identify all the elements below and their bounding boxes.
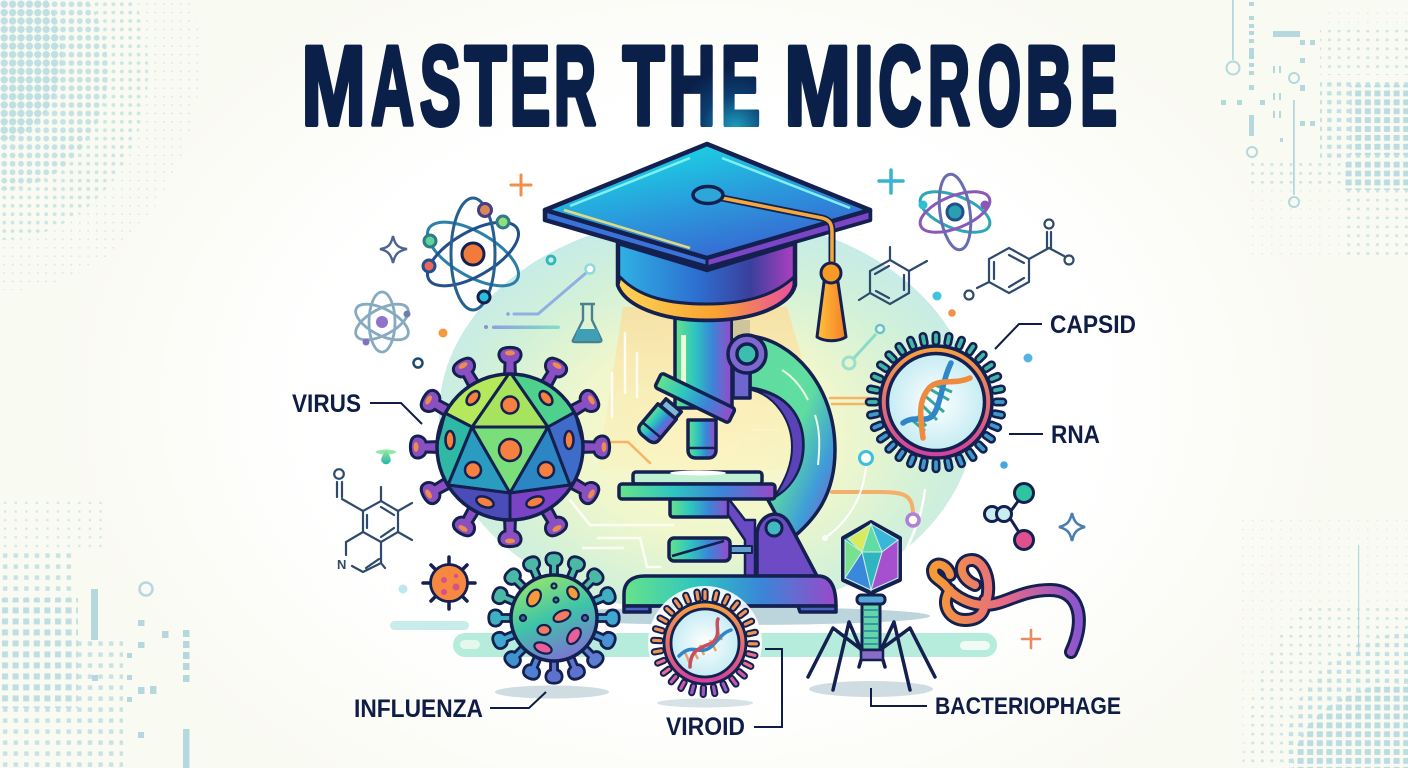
microscope arm xyxy=(750,336,835,540)
title: C xyxy=(878,24,922,148)
right objective lens xyxy=(688,420,716,458)
icon: blue plus xyxy=(879,170,903,193)
gradient circuit line xyxy=(484,325,560,329)
icon: nitrogen molecule xyxy=(334,469,412,572)
circuit traces behind microscope xyxy=(570,333,950,570)
title: O xyxy=(978,24,1021,148)
icon: benzene ring xyxy=(859,247,927,304)
label: influenza xyxy=(354,692,546,723)
tube bracket xyxy=(733,360,750,398)
viroid DNA rungs xyxy=(684,632,722,664)
icon: bacteriophage xyxy=(808,522,935,697)
infographic canvas: E xyxy=(1080,24,1117,148)
label: rna: RNA xyxy=(1051,421,1100,449)
cap gold band xyxy=(618,277,794,320)
coarse focus xyxy=(669,538,752,561)
label: capsid xyxy=(995,311,1136,349)
virus spikes xyxy=(410,347,610,547)
tube grey patch xyxy=(733,320,750,338)
label: influenza: INFLUENZA xyxy=(354,695,483,723)
light beam xyxy=(598,307,835,470)
icon: small atom xyxy=(350,292,414,352)
small virus spots xyxy=(441,574,460,595)
icon: flask xyxy=(573,304,601,342)
title: I xyxy=(854,24,874,148)
circuit line with ring xyxy=(506,264,594,316)
background glow blob xyxy=(439,215,975,615)
arm highlight xyxy=(782,370,819,465)
title: B xyxy=(1025,24,1073,148)
label: viroid: VIROID xyxy=(666,713,745,741)
circuit marks: top right xyxy=(1221,0,1315,207)
icon: carboxyl molecule xyxy=(964,220,1074,300)
icon: small orange plus xyxy=(1022,630,1040,648)
decorative dots xyxy=(398,256,1032,594)
focus knob xyxy=(728,335,766,373)
circuit marks: bottom left xyxy=(91,582,190,768)
phage head xyxy=(843,522,900,593)
left objective lens xyxy=(636,397,682,445)
label: capsid: CAPSID xyxy=(1050,311,1136,339)
pillar xyxy=(757,514,817,576)
viroid ring xyxy=(664,602,746,684)
tail rungs xyxy=(863,610,879,644)
ground stripes xyxy=(390,607,997,657)
label: virus: VIRUS xyxy=(292,390,361,418)
specimen slide xyxy=(633,472,762,484)
nosepiece xyxy=(655,373,735,423)
right circuit line xyxy=(843,325,884,369)
label: virus xyxy=(292,390,422,424)
label: viroid xyxy=(666,649,782,741)
graduation cap xyxy=(545,144,870,341)
tassel knot xyxy=(821,263,841,283)
virus facets xyxy=(438,376,582,518)
viroid DNA blue strand xyxy=(679,630,731,656)
icon: large atom xyxy=(418,198,528,310)
virus shadows xyxy=(495,686,753,708)
DNA orange strand xyxy=(921,378,970,438)
microscope xyxy=(619,318,836,612)
mortarboard top xyxy=(545,144,870,258)
icon: green drop xyxy=(376,449,396,464)
column xyxy=(728,498,755,576)
title: R xyxy=(554,24,596,148)
capsid disc xyxy=(888,354,984,450)
right lens tip line xyxy=(689,447,715,449)
tube highlight xyxy=(681,335,686,385)
title: R xyxy=(928,24,970,148)
phage tail xyxy=(862,604,880,650)
title: S xyxy=(420,24,461,148)
DNA rungs xyxy=(912,385,952,431)
pillar knob xyxy=(766,520,782,536)
arm inner crescent xyxy=(752,390,803,496)
microscope tube xyxy=(675,318,732,408)
icon: viroid strand worm xyxy=(933,560,1079,652)
icon: virus xyxy=(410,347,610,547)
viroid disc xyxy=(671,609,739,677)
halftone: bottom right corner xyxy=(1235,520,1408,768)
influenza spikes xyxy=(489,553,619,683)
halftone: top left corner xyxy=(0,0,200,290)
phage base plate xyxy=(861,650,883,660)
title: E xyxy=(510,24,550,148)
title: T xyxy=(623,24,664,148)
title: E xyxy=(721,24,760,148)
icon: orange plus xyxy=(511,175,531,195)
phage shadow xyxy=(809,681,933,697)
viroid halo xyxy=(648,586,762,700)
influenza body xyxy=(511,575,597,661)
virus spots xyxy=(446,389,574,510)
capsid spikes xyxy=(866,332,1006,472)
viroid DNA red strand xyxy=(690,619,718,667)
DNA blue strand xyxy=(903,363,951,423)
tassel cord xyxy=(722,198,832,262)
small virus spikes xyxy=(423,557,475,609)
influenza spots xyxy=(520,584,588,656)
icon: right sparkle xyxy=(1059,513,1085,541)
icon: capsid with DNA xyxy=(866,332,1006,472)
title: T xyxy=(465,24,506,148)
mortarboard edge xyxy=(545,210,870,267)
cap button xyxy=(693,186,723,204)
microscope base xyxy=(624,576,836,606)
condenser xyxy=(670,498,730,517)
icon: small orange virus xyxy=(423,557,475,609)
microscope stage xyxy=(619,484,775,499)
slide glint xyxy=(670,470,726,476)
virus outline xyxy=(437,374,583,520)
halftone: bottom left corner xyxy=(0,498,123,768)
tassel xyxy=(817,282,846,341)
icon: influenza virus xyxy=(489,553,619,683)
icon: right atom xyxy=(915,172,995,252)
title: H xyxy=(668,24,716,148)
cap body xyxy=(618,243,795,320)
base foot xyxy=(624,606,836,612)
icon: left sparkle xyxy=(380,236,407,263)
icon: ball-and-stick molecule xyxy=(984,484,1034,550)
title: M xyxy=(302,24,366,148)
label: rna xyxy=(1009,421,1100,449)
phage collar xyxy=(857,595,885,604)
title: M xyxy=(784,24,851,148)
halftone: top right corner xyxy=(1250,5,1408,260)
viroid spikes xyxy=(651,589,759,697)
board left rim xyxy=(564,210,690,248)
title: A xyxy=(371,24,414,148)
phage head facets xyxy=(845,524,898,590)
icon: viroid with DNA xyxy=(648,586,762,700)
label: bacteriophage: BACTERIOPHAGE xyxy=(935,693,1121,720)
small virus body xyxy=(430,564,468,602)
nitrogen label: N xyxy=(337,557,346,572)
label: bacteriophage xyxy=(871,688,1121,720)
phage legs xyxy=(808,622,935,690)
tassel cord colour xyxy=(722,198,832,262)
board top rim xyxy=(570,158,850,208)
mortarboard right edge xyxy=(707,210,870,267)
capsid ring xyxy=(880,346,992,458)
